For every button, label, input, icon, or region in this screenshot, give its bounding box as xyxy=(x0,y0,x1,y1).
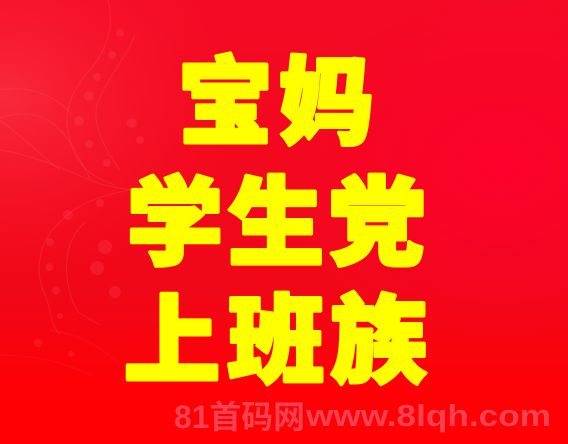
watermark: site name: 81首码网 xyxy=(174,399,305,435)
watermark xyxy=(174,398,551,435)
headline: 上班族: 上班族 xyxy=(124,289,427,396)
decorative floral line pattern xyxy=(0,0,144,375)
headline: 宝妈: 宝妈 xyxy=(178,51,374,157)
watermark: url: www.8lqh.com xyxy=(305,398,551,433)
headline: 学生党: 学生党 xyxy=(127,171,425,278)
